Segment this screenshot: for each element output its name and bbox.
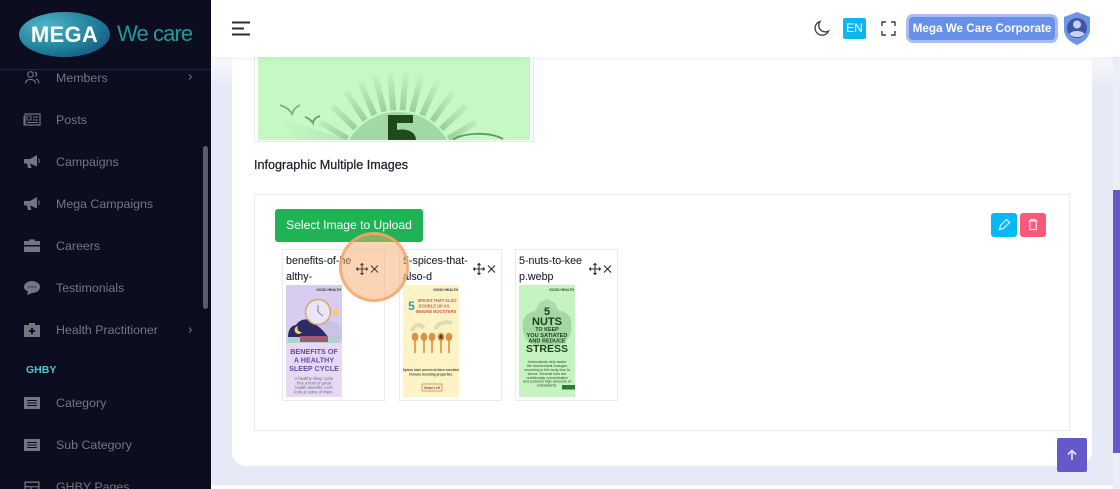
thumbnail image: spices: 5 bbox=[408, 299, 415, 313]
thumbnail image: nuts: 5 bbox=[544, 306, 550, 318]
thumbnail image: nuts bbox=[519, 285, 575, 397]
icon: chat bubble bbox=[24, 281, 40, 295]
icon: moon bbox=[814, 20, 830, 36]
thumbnail image: nuts: AND REDUCE bbox=[528, 338, 566, 344]
file name 1 bbox=[286, 255, 351, 283]
icon: fullscreen bbox=[881, 21, 896, 36]
thumbnail image: spices: GOOD HEALTH bbox=[433, 288, 459, 292]
thumbnail image: nuts: GOOD HEALTH bbox=[549, 288, 575, 292]
icon: menu bbox=[232, 22, 250, 36]
thumbnail image: nuts: antioxidants. bbox=[537, 384, 557, 388]
thumbnail image: nuts: and possess high amounts of bbox=[523, 380, 572, 384]
thumbnail image: spices: Spices have proven to have excellent bbox=[403, 368, 459, 372]
file name 1: althy- bbox=[286, 271, 312, 283]
icon: first aid kit bbox=[24, 323, 40, 337]
thumbnail image: sleep cycle bbox=[286, 285, 342, 397]
icon: page layout bbox=[24, 482, 40, 489]
thumbnail image: sleep cycle: SLEEP CYCLE bbox=[289, 364, 339, 373]
thumbnail image: sleep cycle: BENEFITS OF bbox=[290, 347, 338, 356]
thumbnail image: nuts: occurring in the body due to bbox=[524, 368, 570, 372]
logo oval bbox=[19, 12, 110, 57]
sidebar bbox=[0, 0, 211, 489]
page scrollbar bbox=[1113, 56, 1120, 489]
button: Select Image to Upload: Select Image to Upload bbox=[286, 218, 412, 232]
bottom page strip bbox=[211, 485, 1120, 489]
file name 3: p.webp bbox=[519, 271, 553, 283]
menu: Sub Category: Sub Category bbox=[56, 438, 132, 452]
thumbnail image: sleep cycle: GOOD HEALTH bbox=[316, 288, 342, 292]
menu: Testimonials: Testimonials bbox=[56, 281, 124, 295]
tools: move and remove, image 2 bbox=[472, 262, 496, 276]
thumbnail image: nuts: YOU SATIATED bbox=[527, 333, 567, 339]
thumbnail image: nuts: NUTS bbox=[532, 316, 562, 328]
icon: briefcase bbox=[24, 240, 40, 252]
menu: Category: Category bbox=[56, 396, 106, 410]
menu: Posts: Posts bbox=[56, 113, 87, 127]
icon: megaphone bbox=[24, 197, 40, 210]
thumbnail image: spices: immune boosting properties. bbox=[409, 372, 453, 376]
thumbnail card 2 bbox=[399, 249, 502, 401]
thumbnail image: nuts: nutritionally concentrated bbox=[526, 376, 568, 380]
file name 1: benefits-of-he bbox=[286, 255, 351, 267]
sidebar scrollbar bbox=[203, 146, 208, 309]
language badge bbox=[843, 18, 866, 39]
thumbnail image: spices bbox=[403, 285, 459, 397]
preview image: green infographic bbox=[254, 56, 534, 142]
menu: Members: Members bbox=[56, 71, 108, 85]
thumbnail card 1 bbox=[282, 249, 385, 401]
logo bbox=[0, 0, 211, 70]
icon: list box bbox=[24, 439, 40, 451]
thumbnail image: sleep cycle: A healthy sleep cycle bbox=[295, 376, 334, 381]
file name 3 bbox=[519, 255, 582, 283]
thumbnail image: spices: Swipe Left bbox=[424, 386, 441, 390]
tools: move and remove, image 3 bbox=[588, 262, 612, 276]
thumbnail image: nuts: stress. Several nuts are bbox=[528, 372, 566, 376]
icon: megaphone bbox=[24, 155, 40, 168]
section label: GHBY: GHBY bbox=[26, 364, 56, 376]
thumbnail image: nuts: TO KEEP bbox=[535, 327, 559, 333]
upload panel bbox=[254, 194, 1070, 431]
file name 2 bbox=[403, 255, 468, 283]
thumbnail image: sleep cycle: A HEALTHY bbox=[294, 356, 334, 364]
thumbnail image: spices: SPICES THAT ALSO bbox=[417, 298, 457, 303]
thumbnail image: spices: DOUBLE UP AS bbox=[419, 304, 450, 308]
thumbnail image: nuts: STRESS bbox=[526, 343, 568, 355]
back to top button bbox=[1057, 438, 1087, 472]
thumbnail image: sleep cycle: look at some of them. bbox=[294, 390, 334, 394]
logo oval: MEGA bbox=[31, 22, 98, 47]
language badge: EN bbox=[846, 21, 863, 35]
file name 3: 5-nuts-to-kee bbox=[519, 255, 582, 267]
logo text: We care bbox=[117, 21, 192, 46]
icon: people bbox=[25, 71, 40, 84]
menu: Careers: Careers bbox=[56, 239, 100, 253]
main card bbox=[232, 40, 1092, 466]
thumbnail image: sleep cycle: health benefits. Let's bbox=[295, 385, 333, 390]
thumbnail image: nuts: the biochemical changes bbox=[527, 364, 567, 368]
chevron: Members bbox=[188, 74, 192, 80]
file name 2: 5-spices-that- bbox=[403, 255, 468, 267]
button: Select Image to Upload bbox=[275, 209, 423, 242]
highlight circle: cursor click bbox=[339, 232, 409, 302]
menu: Campaigns: Campaigns bbox=[56, 155, 119, 169]
thumbnail image: nuts: Antioxidants help tackle bbox=[528, 360, 566, 364]
top header bar bbox=[211, 0, 1120, 57]
tools: move and remove, image 1 bbox=[356, 262, 378, 276]
thumbnail image: sleep cycle: has a host of great bbox=[297, 380, 332, 386]
header shadow fade bbox=[211, 57, 1113, 87]
icon: user shield bbox=[1064, 12, 1090, 45]
thumbnail card 3 bbox=[515, 249, 618, 401]
account button: Mega We Care Corporate bbox=[913, 22, 1051, 35]
menu: Mega Campaigns: Mega Campaigns bbox=[56, 197, 153, 211]
button: delete bbox=[1020, 213, 1046, 237]
menu: Health Practitioner: Health Practitioner bbox=[56, 323, 158, 337]
icon: list box bbox=[24, 397, 40, 409]
button: edit bbox=[991, 213, 1017, 237]
chevron: Health Practitioner bbox=[188, 327, 192, 333]
file name 2: also-d bbox=[403, 271, 432, 283]
thumbnail image: spices: IMMUNE BOOSTERS bbox=[416, 309, 457, 314]
icon: newspaper bbox=[24, 113, 41, 126]
heading: Infographic Multiple Images: Infographic Multiple Images bbox=[254, 158, 408, 172]
account button bbox=[906, 14, 1058, 43]
